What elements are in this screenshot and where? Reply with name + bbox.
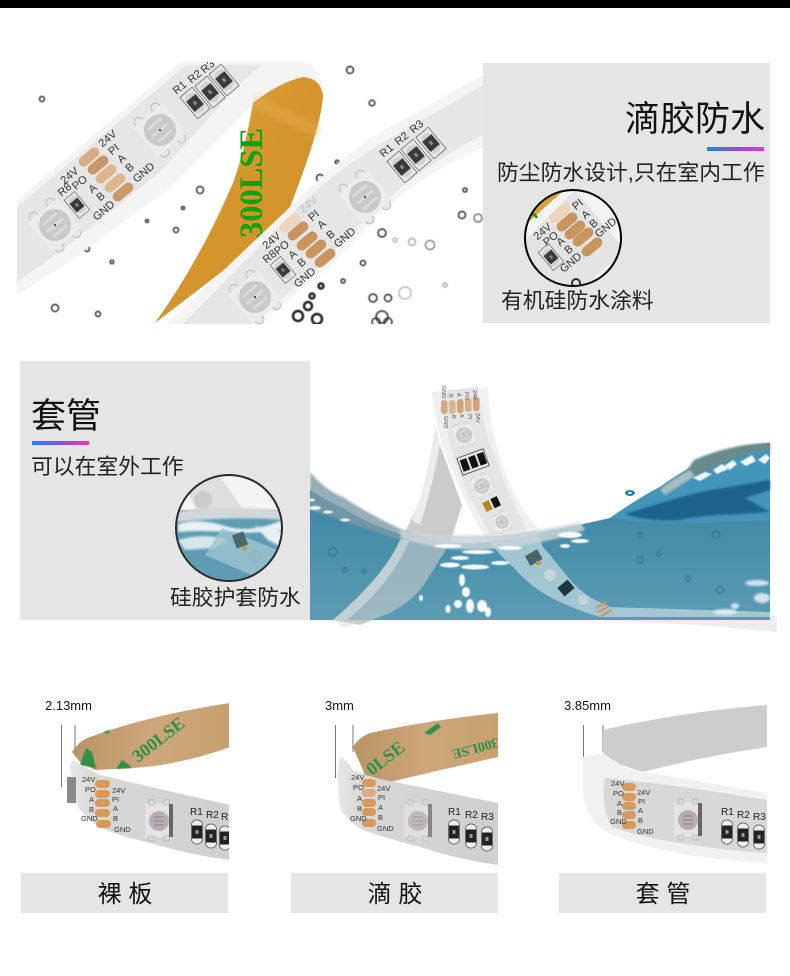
pad labels: B [617, 808, 622, 817]
lower right foam [713, 580, 770, 615]
panel: sleeve strip [564, 698, 767, 863]
pad labels: PI [106, 142, 122, 158]
callout: pad close-up: B [587, 217, 601, 231]
pad labels [262, 195, 354, 286]
pad labels: A [617, 799, 622, 808]
pad labels: 24V [351, 773, 364, 782]
pad labels: A [113, 804, 118, 813]
pad labels: B [123, 161, 137, 175]
panel: bare board strip: R3 [221, 812, 234, 823]
callout caption: 硅胶护套防水 [170, 585, 301, 610]
heading: sleeve: 套管 [31, 397, 101, 436]
strip inner band [604, 778, 767, 853]
panel: dripping-glue photo [17, 58, 483, 328]
strip 1: upper left: R3 [199, 58, 217, 76]
pad labels: B [94, 190, 108, 204]
strip 2: lower right: R1 [378, 142, 396, 160]
pad labels: PI [112, 795, 119, 804]
pad labels: GND [292, 266, 318, 290]
panel: bare board strip: 300LSE [128, 713, 189, 766]
LED 1 [28, 198, 82, 252]
bubbles [329, 532, 724, 594]
pad labels: B [89, 805, 94, 814]
panel: strip in water photo [309, 386, 777, 632]
pad labels: GND [114, 825, 131, 834]
top black bar [0, 0, 790, 8]
panel: dripping-glue strip: 0LSE [362, 737, 408, 779]
black chip [557, 580, 575, 596]
dimension lines [584, 725, 603, 787]
pad labels: PO [353, 783, 364, 792]
LED [145, 800, 173, 841]
pad labels: 24V [611, 779, 624, 788]
callout: underwater close-up [175, 474, 283, 585]
pad labels: B [357, 804, 362, 813]
pad labels: 24V [112, 786, 125, 795]
3M print [424, 723, 441, 735]
pad labels: 24V [377, 784, 390, 793]
pad labels: B [324, 228, 338, 242]
pad labels: A [86, 182, 100, 196]
pad labels: B [295, 256, 309, 270]
accent bar [32, 441, 89, 445]
solder pads [95, 780, 111, 828]
pad labels: GND [610, 817, 627, 826]
solder pads [622, 783, 636, 829]
pad labels: PI [638, 797, 645, 806]
strip pad labels: PI [466, 414, 472, 420]
pad labels: 24V [298, 194, 321, 216]
strip back [603, 705, 767, 772]
back strip above water [333, 425, 462, 625]
pad labels: 24V [59, 165, 82, 187]
label: sleeve: 套 管 [636, 881, 690, 908]
pad labels: 24V [261, 230, 284, 252]
LED 3 [228, 270, 282, 324]
pad labels: GND [91, 199, 117, 223]
pad labels [57, 129, 154, 220]
callout caption: 有机硅防水涂料 [501, 288, 654, 313]
strip resistors [457, 449, 489, 475]
pad labels: 24V [82, 775, 95, 784]
crest foam [693, 454, 770, 481]
panel: dripping-glue strip: R3 [481, 812, 494, 823]
pad labels: GND [350, 814, 367, 823]
back strip under water [333, 536, 450, 620]
label: sleeve [559, 873, 766, 913]
strip pad labels: GND [440, 386, 446, 398]
strip pad labels: B [450, 415, 456, 419]
pad labels: GND [81, 814, 98, 823]
pad labels: A [638, 806, 643, 815]
panel: bare board strip [45, 698, 234, 860]
panel: sleeve description [20, 361, 310, 620]
strip 2: lower right [167, 75, 483, 328]
label: bare board [21, 873, 228, 913]
callout: pad close-up: 24V [532, 221, 555, 243]
pad labels: GND [131, 161, 157, 185]
pad labels: A [315, 218, 329, 232]
callout: pad close-up: PI [570, 197, 586, 213]
label: bare board: 裸 板 [98, 881, 152, 908]
water droplets [40, 66, 482, 326]
strip pad labels: PO [463, 392, 469, 401]
submerged pads [595, 601, 612, 617]
pad labels: PI [306, 208, 322, 224]
callout: pad close-up: A [554, 235, 568, 249]
resistors: R1 [190, 807, 203, 818]
LED [674, 799, 702, 840]
end connector [67, 777, 76, 803]
strip outer sleeve [583, 753, 767, 863]
pad labels: GND [332, 226, 358, 250]
pad labels: 24V [97, 128, 120, 150]
panel: dripping-glue strip: R2 [465, 810, 478, 821]
300LSE backing print: 300LSE [234, 128, 270, 238]
3M print [80, 730, 132, 769]
pad labels [81, 775, 131, 834]
solder pads [280, 214, 336, 268]
strip shadow [333, 616, 777, 632]
panel: sleeve strip: R2 [737, 810, 750, 821]
pad labels [610, 779, 654, 836]
pad labels: A [286, 248, 300, 262]
strip pad labels: 24V [471, 390, 477, 400]
callout: pad close-up: B [562, 243, 576, 257]
panel: dripping-glue description [483, 63, 770, 323]
wave crest right [610, 443, 770, 523]
strip pad labels: GND [442, 416, 448, 428]
dimension lines [62, 725, 75, 787]
strip 1: upper left [17, 58, 323, 323]
LED 2 [134, 102, 186, 158]
submerged circuit [525, 549, 588, 605]
description text: 防尘防水设计,只在室内工作 [497, 160, 765, 185]
strip backing [353, 713, 498, 782]
waterline veil [400, 522, 585, 550]
pad labels: 24V [637, 788, 650, 797]
pad labels: PI [378, 793, 385, 802]
strip 2: lower right: R2 [393, 130, 411, 148]
pad labels: GND [377, 824, 394, 833]
resistors: R1 [721, 807, 734, 818]
pad labels: B [638, 816, 643, 825]
water body [310, 443, 770, 620]
accent bar [707, 147, 764, 151]
pad labels: R8 [56, 181, 74, 199]
strip pad labels [440, 386, 480, 428]
strip pad labels: A [458, 414, 464, 418]
dimension label: 3.85mm [564, 698, 611, 713]
pad labels: PO [272, 238, 292, 258]
resistors [64, 192, 90, 218]
pad labels: B [113, 814, 118, 823]
label: dripping glue [291, 873, 498, 913]
foam and splash [419, 532, 589, 617]
callout: pad close-up [524, 189, 622, 287]
callout: pad close-up: GND [558, 251, 584, 275]
strip front [70, 760, 230, 860]
description text: 可以在室外工作 [31, 454, 184, 479]
pad labels: A [378, 803, 383, 812]
front strip under water [477, 523, 770, 617]
panel: dripping-glue strip: 300LSE [450, 734, 500, 761]
strip pads [441, 397, 480, 414]
pad labels: A [89, 795, 94, 804]
panel: dripping-glue strip [325, 698, 500, 865]
strip 1: upper left: R2 [186, 68, 204, 86]
pad labels: GND [637, 827, 654, 836]
resistors: R1 [448, 807, 461, 818]
solder pads [362, 779, 376, 827]
pad labels [350, 773, 394, 833]
pad labels: B [378, 813, 383, 822]
water splash cluster [293, 284, 324, 324]
strip pad labels: A [455, 393, 461, 397]
label: dripping glue: 滴 胶 [368, 881, 422, 908]
heading: dripping glue: 滴胶防水 [625, 100, 765, 139]
solder pads [78, 148, 134, 202]
strip 1: upper left: R1 [171, 79, 189, 97]
LED [404, 800, 432, 841]
wave crest left [310, 472, 424, 540]
dimension lines [336, 725, 353, 778]
splash droplet [625, 490, 635, 496]
panel: bare board strip: R2 [206, 810, 219, 821]
pad labels: PO [613, 789, 624, 798]
dimension label: 2.13mm [45, 698, 92, 713]
pad labels: PO [85, 785, 96, 794]
strip front [337, 757, 498, 865]
front strip above water [432, 387, 540, 538]
strip LEDs [454, 421, 474, 449]
strip pad labels: B [447, 394, 453, 398]
pad labels: R8 [261, 248, 279, 266]
LED 4 [338, 170, 392, 224]
backing: orange [155, 77, 323, 323]
panel: sleeve strip: R3 [753, 812, 766, 823]
callout: pad close-up: PO [541, 229, 561, 249]
back strip light edge [412, 425, 440, 525]
dimension label: 3mm [325, 698, 354, 713]
callout: pad close-up: GND [593, 216, 619, 240]
strip backing [72, 703, 230, 770]
strip 2: lower right: R3 [408, 118, 426, 136]
pad labels: A [115, 152, 129, 166]
strip pad labels: 24V [474, 413, 480, 423]
pad labels: A [357, 794, 362, 803]
pad labels: PO [70, 173, 90, 193]
callout: pad close-up: A [579, 208, 593, 222]
